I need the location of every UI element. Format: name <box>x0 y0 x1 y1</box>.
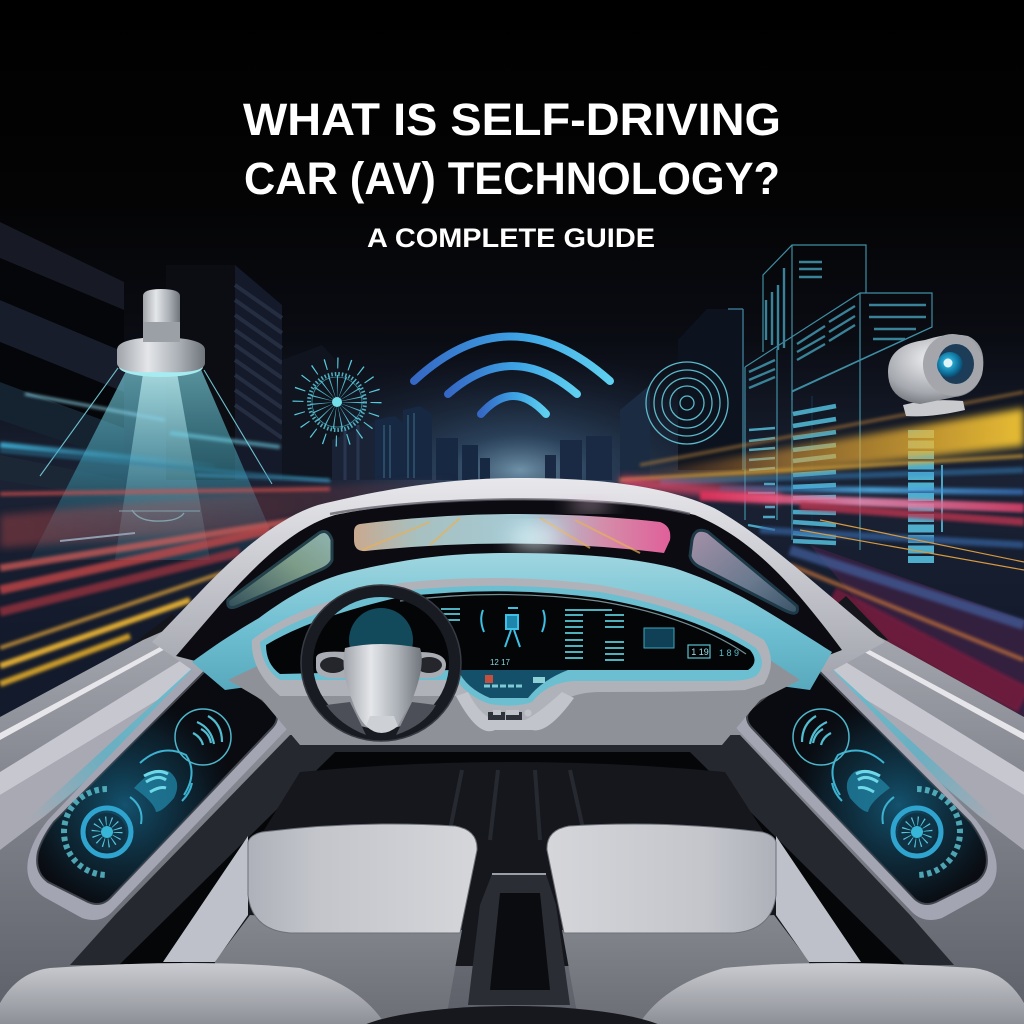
instrument cluster screen <box>252 578 771 727</box>
icon: wifi signal arcs <box>414 336 610 414</box>
building lit windows <box>748 396 942 563</box>
screen icon: car <box>481 608 545 647</box>
side window left <box>228 532 332 608</box>
icon: surveillance camera <box>888 327 990 416</box>
car mirrors <box>135 596 888 648</box>
lower dash and dark surround <box>70 735 954 966</box>
screen text bars <box>441 609 624 660</box>
instrument cluster screen: 1 19 <box>691 647 709 657</box>
side display right <box>732 640 1024 920</box>
bottom centre oval <box>347 1006 677 1024</box>
title <box>243 94 781 204</box>
left slanted dark buildings <box>0 222 124 500</box>
centre vent buttons <box>456 692 574 731</box>
left seat cushion <box>0 963 385 1024</box>
rear-view strip <box>354 514 670 553</box>
icon: lidar sensor with beam <box>30 289 283 560</box>
icon: concentric radar rings <box>646 362 728 444</box>
title: WHAT IS SELF-DRIVING <box>243 94 781 145</box>
steering wheel <box>301 585 461 741</box>
windshield frame <box>152 478 885 672</box>
side display left <box>0 640 292 920</box>
right city skyline <box>545 309 744 480</box>
dashboard teal surround <box>192 553 832 690</box>
horizon glow <box>280 350 760 590</box>
right seat <box>547 824 861 1024</box>
icon: radar burst <box>298 363 376 441</box>
centre console <box>468 874 570 1005</box>
subtitle: A COMPLETE GUIDE <box>367 223 655 253</box>
right seat cushion <box>639 963 1024 1024</box>
left city skyline <box>166 265 490 480</box>
side window right <box>690 530 797 613</box>
right speed streaks <box>610 392 1024 720</box>
car body <box>0 560 1024 1024</box>
wireframe buildings <box>745 245 932 550</box>
title: CAR (AV) TECHNOLOGY? <box>244 153 780 204</box>
left seat <box>163 824 477 1024</box>
instrument cluster screen: 12 17 <box>490 658 511 667</box>
instrument cluster screen: 1 8 9 <box>719 648 739 658</box>
dashboard grey console <box>228 640 800 745</box>
left speed streaks <box>0 394 460 684</box>
